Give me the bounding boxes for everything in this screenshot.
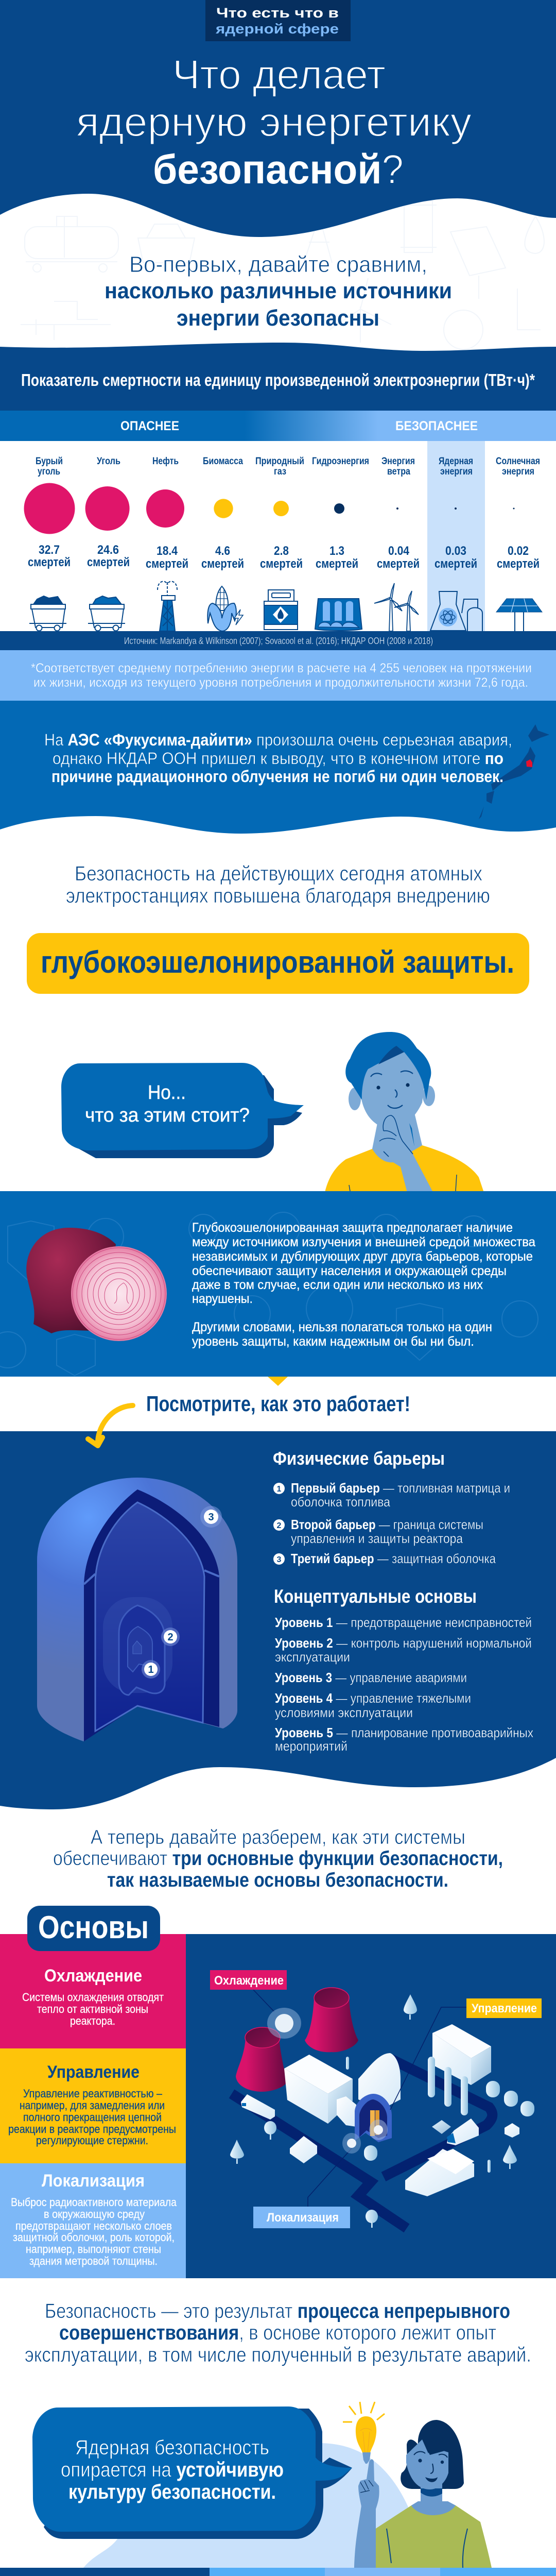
label: containment xyxy=(253,2207,350,2228)
markers: barrier numbers: 3 xyxy=(208,1512,214,1523)
fatality values: 2.8 xyxy=(274,544,289,558)
text: defence in depth definition: даже в том случае, если один или несколько из них xyxy=(192,1278,483,1292)
speech bubble: safety culture: культуру безопасности. xyxy=(68,2481,276,2503)
panel: cooling: реактора. xyxy=(70,2014,115,2027)
source labels: Биомасса xyxy=(203,456,243,467)
panel: containment xyxy=(0,2163,186,2278)
source labels: Природный xyxy=(255,456,304,467)
panel: control: полного прекращения цепной xyxy=(23,2111,162,2124)
panel: containment: здания метровой толщины. xyxy=(29,2255,158,2267)
text: three safety functions: А теперь давайте разберем, как эти системы xyxy=(91,1826,465,1849)
label: cooling xyxy=(210,1970,287,1990)
source labels: Нефть xyxy=(152,456,179,467)
buildings xyxy=(284,2024,519,2196)
panel: safety culture attributes xyxy=(0,2568,556,2576)
list: levels: Уровень 4 — управление тяжелыми xyxy=(275,1690,471,1706)
illustration: isometric nuclear plant xyxy=(186,1934,556,2278)
text: defence in depth definition xyxy=(192,1221,535,1349)
icon: oil derrick xyxy=(158,581,177,631)
panel: culture description xyxy=(0,2568,210,2576)
source labels: Энергия xyxy=(381,456,415,467)
icon: nuclear plant xyxy=(430,591,482,631)
source band: Источник: Markandya & Wilkinson (2007); Sovacool et al. (2016); НКДАР ООН (2008 и 2018) xyxy=(124,636,433,646)
text: Fukushima: причине радиационного облучения не погиб ни один человек. xyxy=(51,767,503,786)
panel: control: Управление xyxy=(47,2062,140,2082)
label: containment: Локализация xyxy=(267,2211,339,2225)
fatality values: 4.6 xyxy=(215,544,230,558)
list: physical barriers: оболочка топлива xyxy=(291,1494,390,1510)
nuclear column highlight xyxy=(427,441,485,631)
list: levels: мероприятий xyxy=(275,1738,348,1754)
title: ядерную энергетику xyxy=(76,99,472,145)
header tag: ядерной сфере xyxy=(215,21,339,37)
list: levels xyxy=(275,1615,533,1754)
header tag: Что есть что в xyxy=(216,5,339,21)
background: top blue wave xyxy=(0,0,556,237)
footnote: их жизни, исходя из текущего уровня потребления и продолжительности жизни 72,6 года. xyxy=(33,675,528,690)
fatality values: 24.6 xyxy=(97,543,119,557)
list: levels: условиями эксплуатации xyxy=(275,1705,413,1720)
speech bubble: but what is behind it xyxy=(61,1063,304,1158)
list: physical barriers: Третий барьер — защитная оболочка xyxy=(291,1551,496,1566)
text: defence in depth definition: независимых и дублирующих друг друга барьеров, которые xyxy=(192,1249,533,1264)
background: chart header wave xyxy=(0,343,556,411)
fatality values: 32.7 xyxy=(39,543,60,557)
title xyxy=(76,52,472,192)
panel: Fukushima xyxy=(0,701,556,834)
backdrop: pale blue blob xyxy=(83,2443,417,2568)
panel: cooling: Системы охлаждения отводят xyxy=(22,1991,164,2004)
fatality values: 0.04 xyxy=(388,544,410,558)
icon: corn biomass xyxy=(207,586,243,631)
markers: barrier numbers: 2 xyxy=(167,1632,173,1643)
source labels: Уголь xyxy=(97,456,120,467)
label: control xyxy=(466,1998,542,2018)
panel: fundamentals xyxy=(0,1906,556,2278)
column: rigorous approach xyxy=(325,2568,440,2576)
watermark: energy line icons xyxy=(21,201,544,349)
bubble chart xyxy=(24,483,515,534)
fatality values xyxy=(28,543,540,571)
cooling towers xyxy=(236,1988,358,2092)
speech bubble: safety culture xyxy=(32,2406,352,2539)
panel: onion explanation xyxy=(0,1191,556,1377)
list: physical barriers: 3 xyxy=(277,1555,282,1564)
icon: gas cylinder xyxy=(264,590,298,630)
text: three safety functions xyxy=(53,1826,503,1891)
source labels: ветра xyxy=(387,466,410,477)
text: Fukushima xyxy=(44,731,512,786)
arrow: curved yellow xyxy=(88,1405,133,1446)
trees xyxy=(230,1994,517,2228)
list: physical barriers: 2 xyxy=(277,1521,282,1530)
panel: control: Управление реактивностью – xyxy=(23,2087,163,2100)
heading: fundamentals: Основы xyxy=(38,1910,149,1945)
text: defence in depth definition: нарушены. xyxy=(192,1292,253,1306)
panel: fatality chart xyxy=(0,343,556,701)
text: continuous improvement xyxy=(25,2300,531,2366)
text: defence in depth intro: Безопасность на действующих сегодня атомных xyxy=(75,862,482,885)
speech bubble: safety culture: опирается на устойчивую xyxy=(61,2459,284,2481)
source labels: Гидроэнергия xyxy=(312,456,369,467)
panel: containment: в окружающую среду xyxy=(44,2208,145,2221)
fatality values: смертей xyxy=(260,557,303,571)
text: defence in depth definition: Другими словами, нельзя полагаться только на один xyxy=(192,1320,492,1334)
panel: containment: например, выполняют стены xyxy=(26,2243,161,2256)
gradient scale band: ОПАСНЕЕ xyxy=(120,419,179,433)
pipes and tanks xyxy=(364,2057,534,2161)
panel: cooling xyxy=(0,1934,186,2048)
panel: containment: Выброс радиоактивного материала xyxy=(11,2196,177,2209)
list: physical barriers xyxy=(273,1480,510,1566)
panel: title section xyxy=(0,0,556,331)
fatality values: смертей xyxy=(377,557,420,571)
panel: cooling: Охлаждение xyxy=(44,1966,142,1986)
text: defence in depth definition: уровень защиты, каким надежным он бы ни был. xyxy=(192,1334,474,1349)
title: Что делает xyxy=(172,52,386,97)
heading: see how it works: Посмотрите, как это работает! xyxy=(146,1392,410,1416)
panel: control: например, для замедления или xyxy=(20,2099,165,2112)
callout: defence in depth xyxy=(27,933,529,994)
trucks xyxy=(241,2094,479,2145)
source labels: энергия xyxy=(440,466,473,477)
speech bubble: but what is behind it: что за этим стоит? xyxy=(85,1105,250,1126)
fatality values: смертей xyxy=(146,557,188,571)
text: defence in depth definition: Глубокоэшелонированная защита предполагает наличие xyxy=(192,1221,513,1235)
watermark: shields xyxy=(0,1212,538,1376)
list: physical barriers: 1 xyxy=(277,1485,282,1494)
source labels: энергия xyxy=(502,466,534,477)
footnote xyxy=(0,650,556,701)
heading: fundamentals xyxy=(27,1906,160,1951)
text: defence in depth definition: обеспечивают защиту населения и окружающей среды xyxy=(192,1264,507,1278)
speech bubble: but what is behind it: Но... xyxy=(148,1082,186,1104)
text: continuous improvement: совершенствования, в основе которого лежит опыт xyxy=(59,2321,496,2344)
label: cooling: Охлаждение xyxy=(214,1974,284,1988)
leader lines and markers xyxy=(253,1990,466,2207)
illustration: woman with idea xyxy=(343,2402,497,2576)
column: questioning attitude xyxy=(210,2568,325,2576)
roads xyxy=(232,2059,492,2228)
header tag xyxy=(205,0,351,41)
panel: cooling: тепло от активной зоны xyxy=(37,2003,148,2015)
panel: control: реакции в реакторе предусмотрены xyxy=(8,2123,176,2136)
source labels xyxy=(36,456,540,477)
list: physical barriers: Второй барьер — граница системы xyxy=(291,1517,483,1532)
fatality values: 1.3 xyxy=(329,544,344,558)
list: levels: Уровень 5 — планирование противоаварийных xyxy=(275,1725,533,1740)
list: levels: Уровень 2 — контроль нарушений нормальной xyxy=(275,1635,532,1651)
speech bubble: safety culture: Ядерная безопасность xyxy=(75,2436,269,2459)
background: dark blue wave xyxy=(0,1431,556,1809)
source labels: Ядерная xyxy=(439,456,473,467)
fatality values: смертей xyxy=(28,555,71,569)
heading: physical barriers: Физические барьеры xyxy=(273,1448,445,1469)
list: physical barriers: Первый барьер — топливная матрица и xyxy=(291,1480,510,1496)
fatality values: смертей xyxy=(201,557,244,571)
gradient scale band: БЕЗОПАСНЕЕ xyxy=(395,419,478,433)
text: three safety functions: так называемые основы безопасности. xyxy=(107,1869,448,1891)
subtitle xyxy=(105,252,452,331)
icon: wind turbines xyxy=(374,583,419,631)
illustration: thinking man xyxy=(323,1032,488,1236)
text: defence in depth intro: электростанциях повышена благодаря внедрению xyxy=(66,885,490,907)
icon: solar panel xyxy=(496,599,542,631)
title: безопасной? xyxy=(153,146,404,192)
icon: Japan map xyxy=(479,724,549,819)
gradient scale band xyxy=(0,411,556,441)
fatality values: смертей xyxy=(316,557,358,571)
fatality values: 0.02 xyxy=(508,544,529,558)
icon: lignite cart xyxy=(29,596,66,631)
source labels: Солнечная xyxy=(496,456,540,467)
label: control: Управление xyxy=(472,2002,537,2015)
arrow: yellow pointer xyxy=(268,1377,288,1386)
text: Fukushima: На АЭС «Фукусима-дайити» произошла очень серьезная авария, xyxy=(44,731,512,749)
text: continuous improvement: Безопасность — это результат процесса непрерывного xyxy=(45,2300,510,2323)
panel: barriers and levels xyxy=(0,1405,556,1809)
fatality values: 18.4 xyxy=(157,544,178,558)
text: defence in depth intro xyxy=(66,862,490,907)
source labels: газ xyxy=(274,466,286,477)
background: blue wave xyxy=(0,701,556,834)
list: levels: Уровень 3 — управление авариями xyxy=(275,1670,467,1685)
panel: containment: Локализация xyxy=(42,2171,145,2191)
list: physical barriers: управления и защиты реактора xyxy=(291,1531,463,1546)
text: defence in depth definition: между источником излучения и внешней средой множества xyxy=(192,1235,535,1249)
list: levels: эксплуатации xyxy=(275,1649,350,1665)
panel: control: регулирующие стержни. xyxy=(36,2134,148,2147)
list: levels: Уровень 1 — предотвращение неисправностей xyxy=(275,1615,532,1630)
fatality values: смертей xyxy=(87,555,130,569)
fatality values: 0.03 xyxy=(445,544,466,558)
heading: conceptual foundations: Концептуальные основы xyxy=(274,1586,477,1607)
source labels: уголь xyxy=(38,466,60,477)
reactor cutaway xyxy=(355,2094,392,2142)
image: red onion xyxy=(26,1228,167,1341)
subtitle: энергии безопасны xyxy=(177,306,379,331)
panel: containment: защитной оболочки, роль которой, xyxy=(13,2231,175,2244)
source band xyxy=(0,631,556,650)
text: three safety functions: обеспечивают три основные функции безопасности, xyxy=(53,1848,503,1870)
markers: barrier numbers xyxy=(142,1506,222,1679)
panel: containment: предотвращают несколько слоев xyxy=(15,2219,172,2232)
source labels: Бурый xyxy=(36,456,63,467)
column: open communication xyxy=(440,2568,556,2576)
fatality values: смертей xyxy=(497,557,540,571)
illustration: reactor containment xyxy=(37,1478,237,1741)
markers: barrier numbers: 1 xyxy=(148,1664,154,1675)
fatality values: смертей xyxy=(435,557,477,571)
panel: control xyxy=(0,2048,186,2163)
icon: hydro dam xyxy=(315,599,362,631)
subtitle: насколько различные источники xyxy=(105,278,452,303)
text: Fukushima: однако НКДАР ООН пришел к выводу, что в конечном итоге по xyxy=(53,749,503,768)
subtitle: Во-первых, давайте сравним, xyxy=(129,252,427,277)
icon: coal cart xyxy=(88,596,125,631)
